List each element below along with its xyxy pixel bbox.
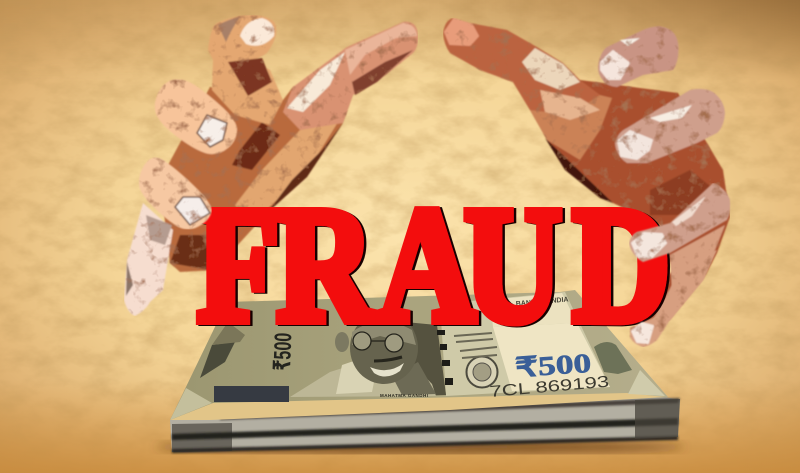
middle finger <box>615 89 725 163</box>
RBI seal <box>466 356 498 388</box>
left hand <box>124 15 418 316</box>
title: FRAUD: FRAUD <box>197 173 670 356</box>
dark panel <box>214 386 289 402</box>
pinky <box>124 203 173 316</box>
middle finger <box>155 80 237 154</box>
stack of rupee notes <box>155 290 685 453</box>
black side marks <box>437 330 453 385</box>
top banknote <box>170 290 668 420</box>
serial number: 7CL 869193 <box>489 374 610 401</box>
emblem <box>594 342 632 374</box>
stack edges <box>170 397 680 452</box>
right hand <box>443 18 730 330</box>
left ring finger <box>139 157 212 229</box>
thumb <box>283 22 418 130</box>
thumb <box>443 18 600 115</box>
bank name: BANK OF INDIA <box>516 296 569 308</box>
left corner fan <box>170 388 212 420</box>
signature text block <box>454 333 497 358</box>
portrait captions: MAHATMA GANDHI <box>380 393 428 398</box>
denomination vertical: ₹500 <box>269 332 297 371</box>
cream margin <box>170 393 665 420</box>
right ring finger and pinky over the title <box>629 183 730 347</box>
light centre panel <box>440 292 610 396</box>
right corner fan <box>628 370 665 396</box>
index finger <box>208 15 283 125</box>
note shadow tone <box>200 342 235 378</box>
stack shadow <box>155 441 685 453</box>
portrait: Gandhi <box>290 312 446 397</box>
index finger <box>598 26 678 87</box>
palm <box>160 87 353 272</box>
denomination: ₹500 <box>514 348 592 383</box>
palm <box>513 80 730 330</box>
